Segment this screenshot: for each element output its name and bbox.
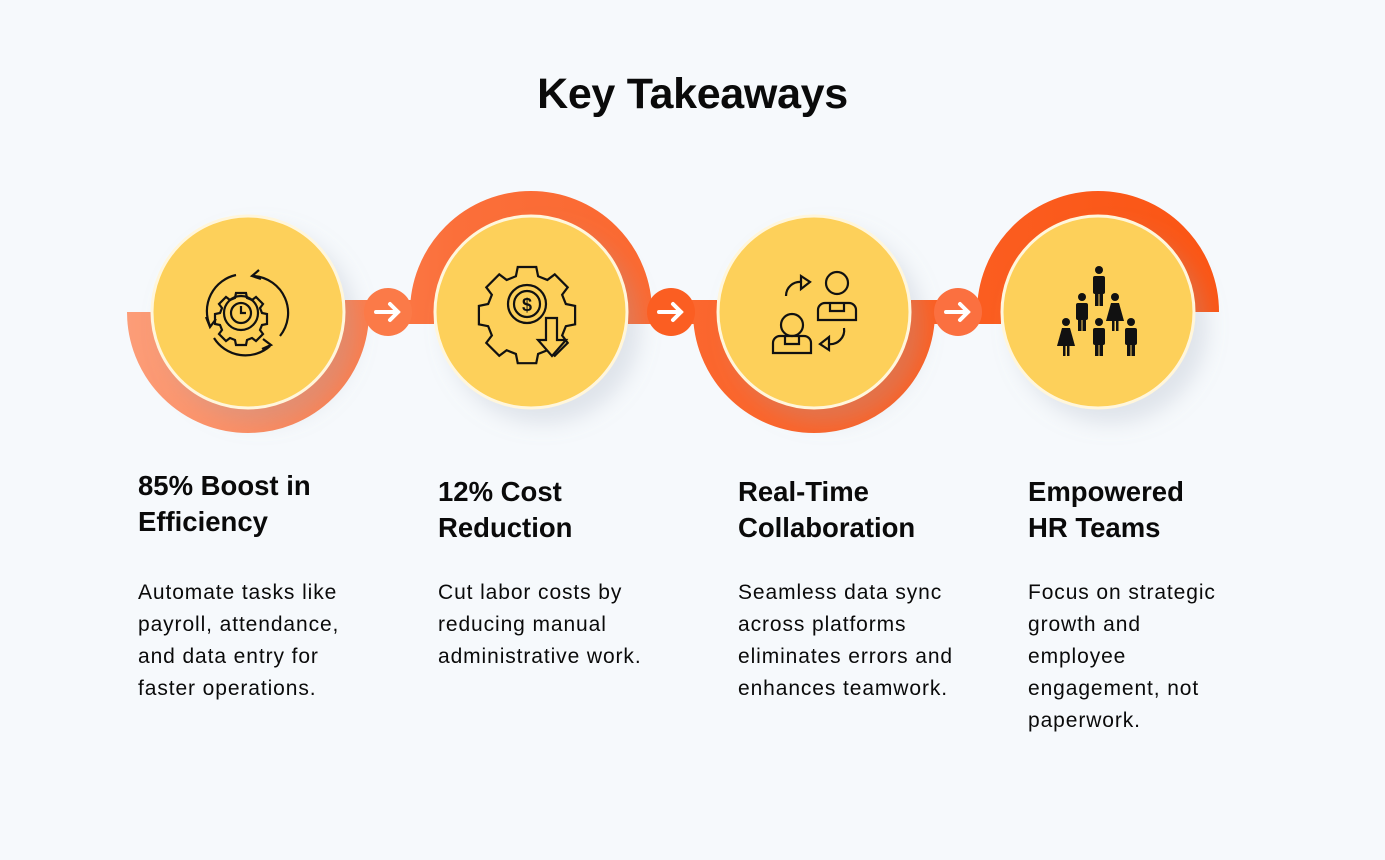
text block 3: across platforms	[738, 613, 906, 636]
text block 2: 12% Cost	[438, 476, 562, 507]
text block 2	[438, 476, 642, 668]
circle 2	[435, 216, 627, 408]
text block 1: payroll, attendance,	[138, 613, 339, 636]
title: Key Takeaways	[537, 70, 848, 118]
text block 4: Empowered	[1028, 476, 1184, 507]
text block 4: growth and	[1028, 613, 1141, 636]
text block 1: Automate tasks like	[138, 581, 337, 604]
text block 1: faster operations.	[138, 677, 316, 700]
connector arcs	[139, 203, 1207, 421]
text block 1: 85% Boost in	[138, 470, 311, 501]
circle 3	[718, 216, 910, 408]
text block 3: Collaboration	[738, 512, 915, 543]
text block 1: Efficiency	[138, 506, 268, 537]
text block 4: Focus on strategic	[1028, 581, 1216, 604]
text block 1	[138, 470, 339, 700]
text block 2: reducing manual	[438, 613, 607, 636]
icon: gear with dollar and down arrow	[479, 267, 575, 363]
text block 2: administrative work.	[438, 645, 642, 668]
text block 2: Reduction	[438, 512, 572, 543]
text block 4: paperwork.	[1028, 709, 1141, 732]
text block 4	[1028, 476, 1216, 732]
text block 3	[738, 476, 953, 700]
arrow 1	[364, 288, 412, 336]
text block 4: HR Teams	[1028, 512, 1160, 543]
text block 4: engagement, not	[1028, 677, 1199, 700]
icon: gear with clock and cycle arrows	[206, 270, 288, 355]
icon: gear with dollar and down arrow: $	[522, 295, 532, 315]
icon: two people exchanging	[773, 272, 856, 353]
text block 3: Real-Time	[738, 476, 869, 507]
text block 1: and data entry for	[138, 645, 319, 668]
text block 3: Seamless data sync	[738, 581, 942, 604]
circle 1	[152, 216, 344, 408]
icon: people pyramid	[1057, 266, 1137, 356]
circle 4	[1002, 216, 1194, 408]
arrow 3	[934, 288, 982, 336]
text block 3: enhances teamwork.	[738, 677, 948, 700]
arrow 2	[647, 288, 695, 336]
text block 2: Cut labor costs by	[438, 581, 622, 604]
text block 4: employee	[1028, 645, 1126, 668]
text block 3: eliminates errors and	[738, 645, 953, 668]
